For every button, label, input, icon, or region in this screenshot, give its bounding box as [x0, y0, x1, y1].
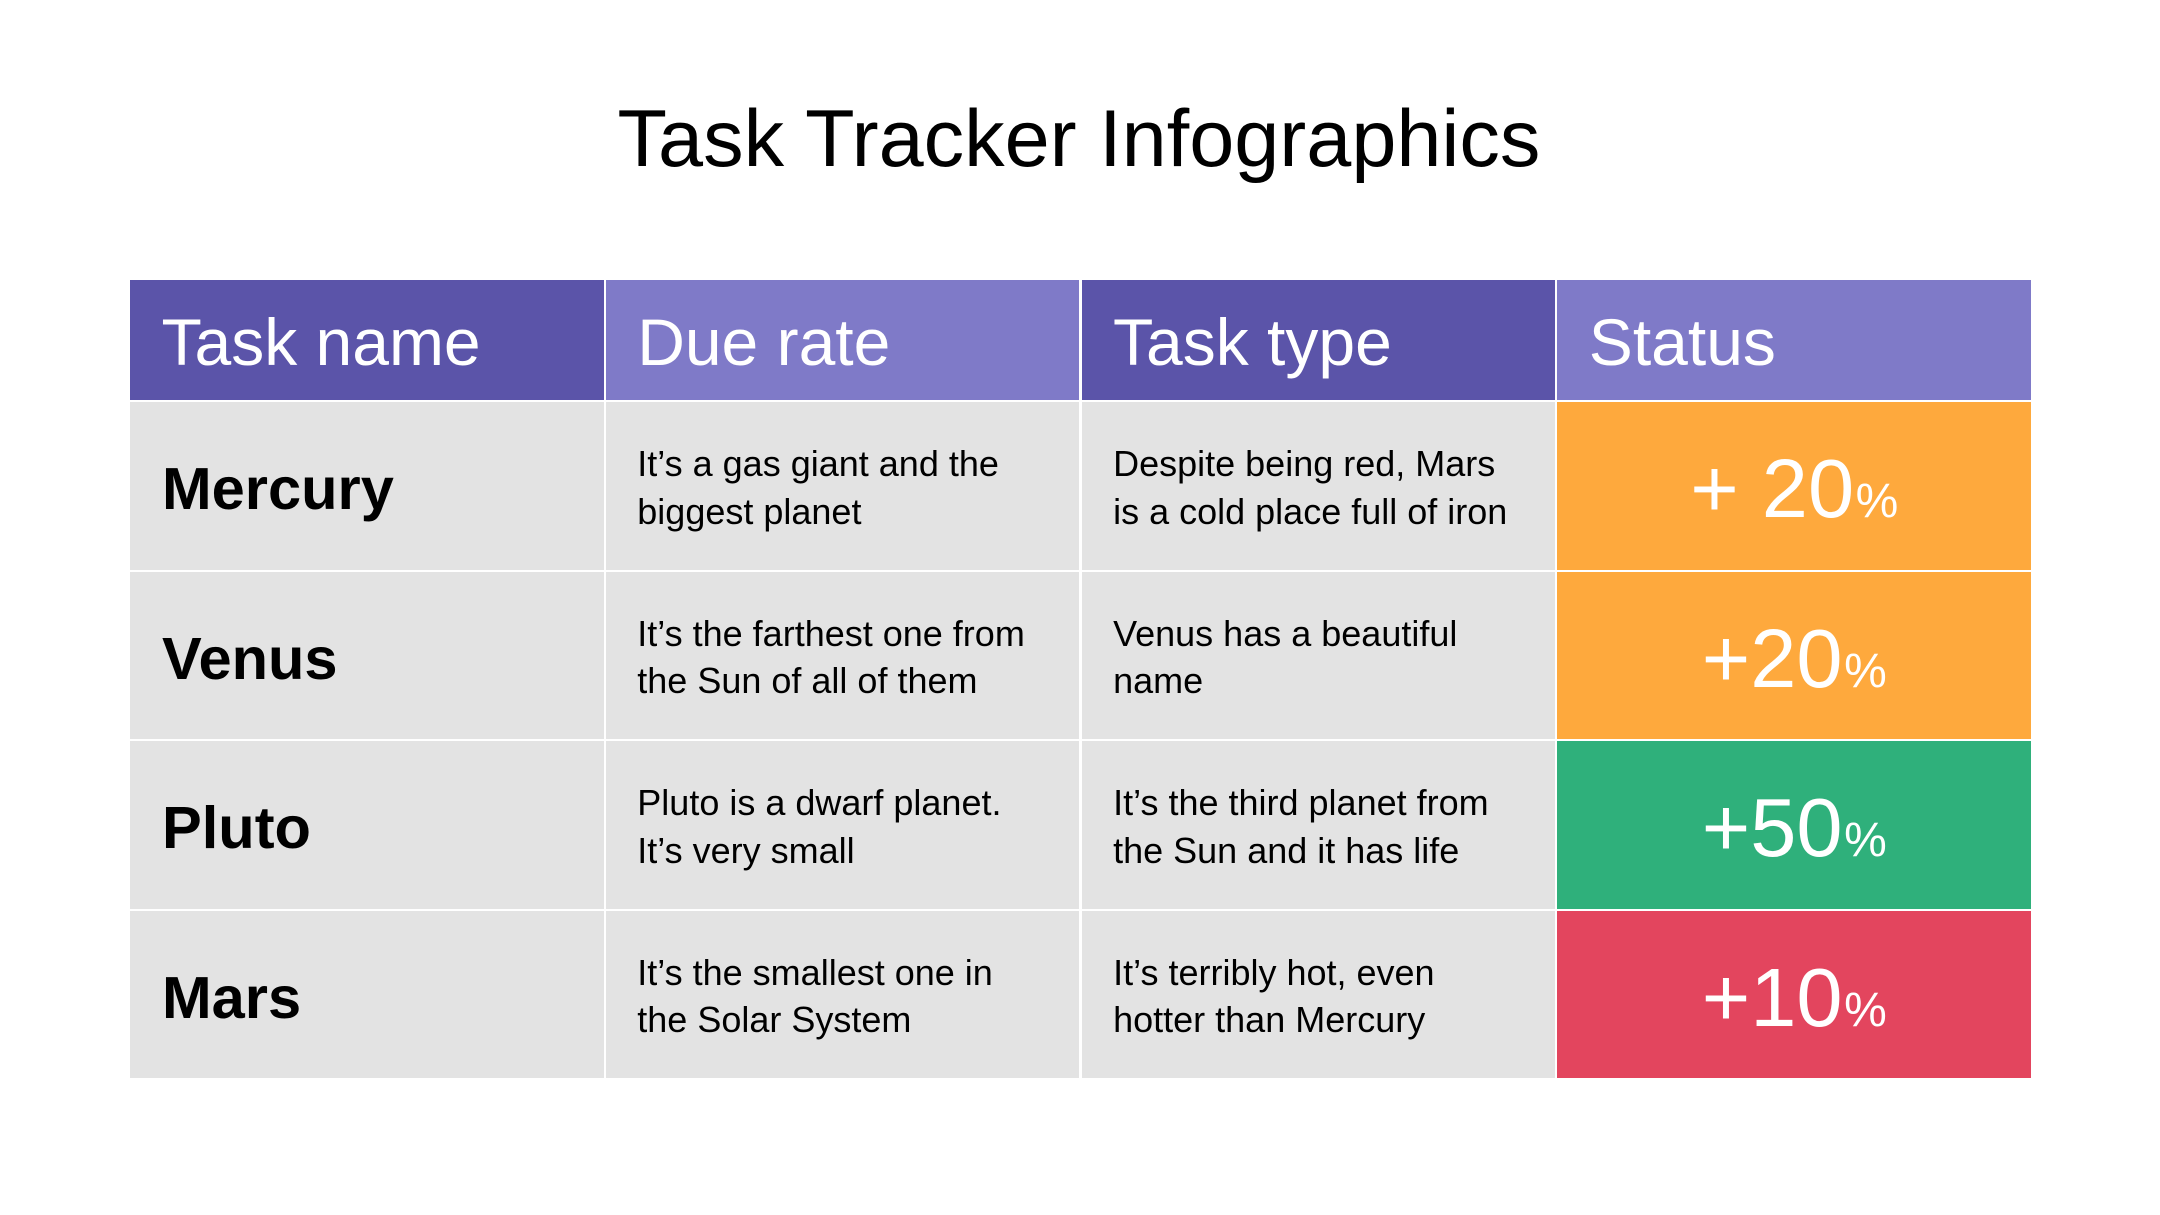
header: status: Status [1589, 305, 1776, 379]
header: due rate: Due rate [637, 305, 890, 379]
table: task tracker [130, 280, 2031, 1078]
due rate: Pluto: It’s very small [637, 830, 855, 871]
due rate: Mercury: It’s a gas giant and the [637, 443, 999, 484]
due rate: Pluto [606, 741, 1079, 908]
task name: Pluto: Pluto [162, 794, 311, 861]
due rate: Mars: It’s the smallest one in [637, 952, 993, 993]
header: due rate [606, 280, 1079, 400]
due rate: Mercury [606, 402, 1079, 570]
title: Task Tracker Infographics [618, 94, 1540, 184]
task type: Mercury [1082, 402, 1555, 570]
status: Venus 20% [1557, 572, 2031, 739]
status: Pluto 50% [1557, 741, 2031, 908]
task type: Venus [1082, 572, 1555, 739]
header: task name: Task name [162, 305, 481, 379]
due rate: Mars: the Solar System [637, 999, 911, 1040]
due rate: Mercury: biggest planet [637, 491, 861, 532]
due rate: Venus: It’s the farthest one from [637, 613, 1025, 654]
task type: Venus: Venus has a beautiful [1113, 613, 1457, 654]
task type: Pluto: It’s the third planet from [1113, 782, 1489, 823]
task name: Venus: Venus [162, 625, 338, 692]
task name: Mars: Mars [162, 964, 301, 1031]
header: task type [1082, 280, 1555, 400]
status: Mars 10% [1557, 910, 2031, 1078]
due rate: Mars [606, 910, 1079, 1078]
task type: Pluto: the Sun and it has life [1113, 830, 1459, 871]
task name: Mercury [130, 402, 604, 570]
task type: Mars: hotter than Mercury [1113, 999, 1425, 1040]
task type: Mars: It’s terribly hot, even [1113, 952, 1435, 993]
task type: Venus: name [1113, 660, 1203, 701]
task name: Pluto [130, 741, 604, 908]
task type: Pluto [1082, 741, 1555, 908]
status: Pluto 50%: +50% [1702, 781, 1887, 874]
status: Venus 20%: +20% [1702, 612, 1887, 705]
header: task type: Task type [1113, 305, 1392, 379]
due rate: Venus: the Sun of all of them [637, 660, 978, 701]
task name: Mars [130, 910, 604, 1078]
status: Mars 10%: +10% [1702, 951, 1887, 1044]
task type: Mercury: Despite being red, Mars [1113, 443, 1495, 484]
task name: Mercury: Mercury [162, 455, 394, 522]
header: status [1557, 280, 2031, 400]
due rate: Venus [606, 572, 1079, 739]
task type: Mercury: is a cold place full of iron [1113, 491, 1507, 532]
task type: Mars [1082, 910, 1555, 1078]
header: task name [130, 280, 604, 400]
status: Mercury 20% [1557, 402, 2031, 570]
status: Mercury 20%: + 20% [1690, 442, 1898, 535]
due rate: Pluto: Pluto is a dwarf planet. [637, 782, 1001, 823]
task name: Venus [130, 572, 604, 739]
